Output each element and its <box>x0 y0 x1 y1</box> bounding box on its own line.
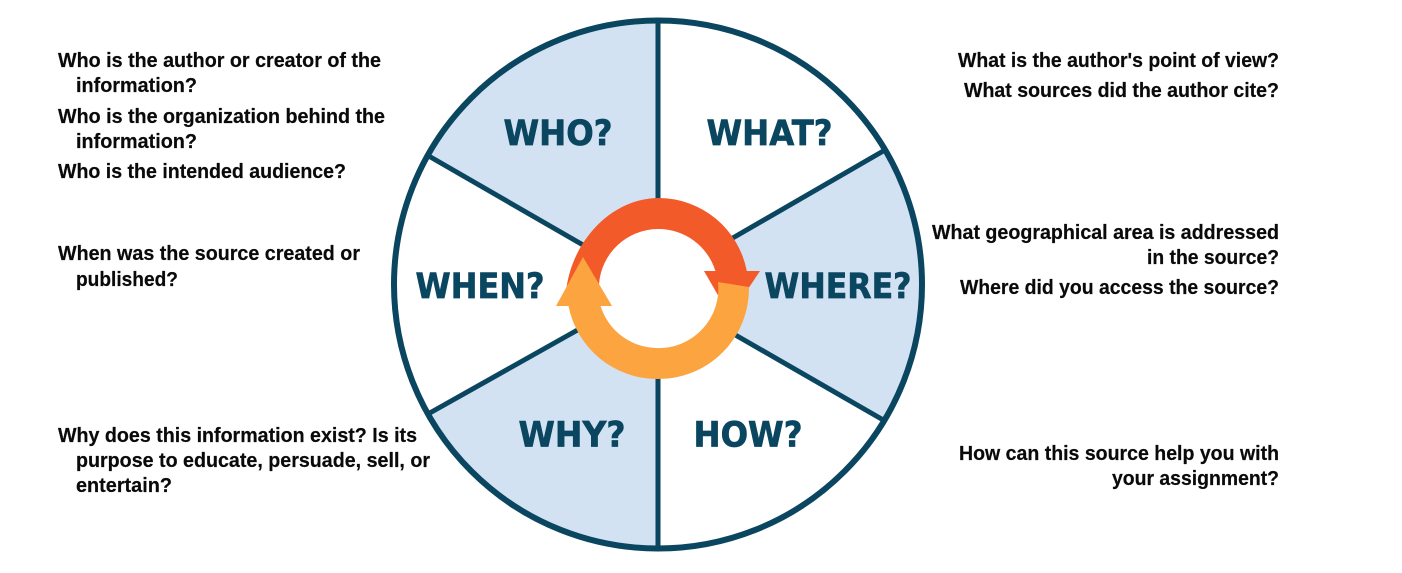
label: where: WHERE? <box>764 267 912 307</box>
text block: how questions: How can this source help you with <box>959 443 1279 465</box>
wheel <box>391 18 925 552</box>
text block: who questions: information? <box>76 75 197 97</box>
text block: who questions: Who is the intended audience? <box>58 161 346 183</box>
text block: when questions: published? <box>76 269 178 291</box>
text block: where questions: Where did you access the source? <box>960 277 1279 299</box>
text block: why questions: Why does this information exist? Is its <box>58 425 417 447</box>
wedge: who <box>432 24 656 242</box>
text block: who questions: Who is the organization behind the <box>58 106 385 128</box>
text block: why questions: purpose to educate, persuade, sell, or <box>76 450 430 472</box>
label: what: WHAT? <box>706 114 832 154</box>
label: why: WHY? <box>518 416 626 456</box>
wedge: where <box>734 154 919 417</box>
wedge: why <box>432 332 656 546</box>
label: when: WHEN? <box>416 267 544 307</box>
label: how: HOW? <box>694 416 802 456</box>
text block: when questions <box>58 243 360 291</box>
label: who: WHO? <box>504 114 612 154</box>
text block: where questions: in the source? <box>1147 247 1279 269</box>
text block: who questions <box>58 50 385 183</box>
text block: when questions: When was the source created or <box>58 243 360 265</box>
text block: what questions <box>958 50 1279 102</box>
text block: where questions <box>932 222 1279 299</box>
text block: who questions: information? <box>76 131 197 153</box>
text block: where questions: What geographical area is addressed <box>932 222 1279 244</box>
text block: why questions: entertain? <box>76 475 172 497</box>
text block: who questions: Who is the author or creator of the <box>58 50 381 72</box>
text block: what questions: What sources did the author cite? <box>964 80 1279 102</box>
centre hub <box>592 224 722 354</box>
text block: what questions: What is the author's point of view? <box>958 50 1279 72</box>
text block: how questions <box>959 443 1279 490</box>
text block: why questions <box>58 425 430 497</box>
wheel spokes <box>427 20 885 548</box>
text block: how questions: your assignment? <box>1112 468 1279 490</box>
wheel outline <box>394 20 922 548</box>
arrow: orange lower cycle arrow <box>556 257 749 379</box>
arrow: red upper cycle arrow <box>566 198 760 316</box>
